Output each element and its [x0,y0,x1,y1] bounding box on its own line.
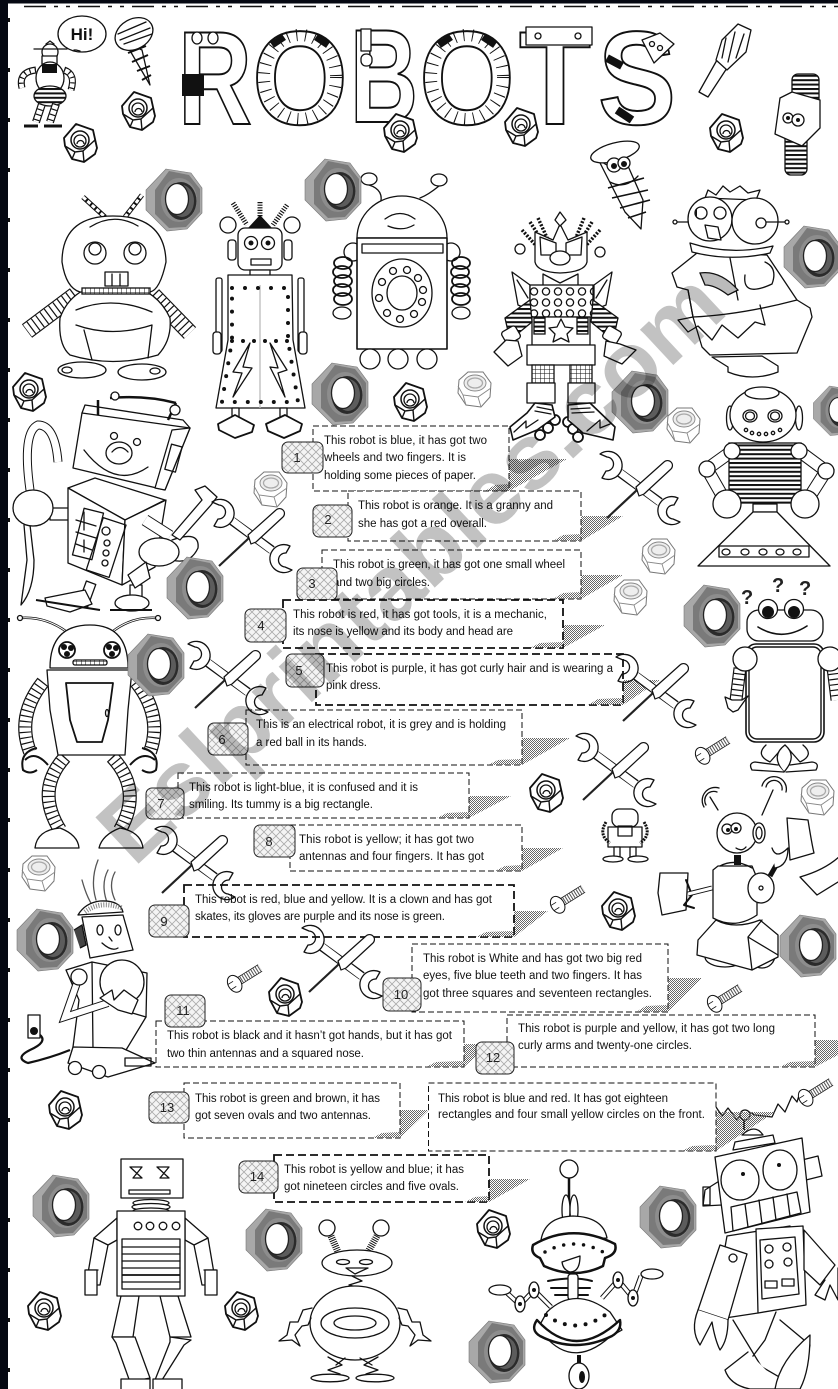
callout: blue and red robot: This robot is blue and red. It has got eighteen [438,1093,668,1105]
icon: big nut [612,371,668,433]
icon: small nut [122,92,155,130]
robot: saucer robot [489,1160,663,1389]
callout 8 [254,825,563,871]
speech bubble: Hi! [71,25,93,44]
callout 7 [146,773,511,819]
icon: big nut [17,909,73,971]
icon: big nut [684,585,740,647]
callout 13: 13 [160,1100,174,1115]
callout 14: got nineteen circles and five ovals. [284,1181,459,1193]
callout 5 [286,654,660,705]
callout 8: This robot is yellow; it has got two [299,834,474,846]
robot: mechanic holding wrench [13,392,217,612]
icon: big nut [784,226,838,288]
callout: blue and red robot [428,1083,775,1151]
callout 12 [476,1015,838,1074]
callout 12: 12 [486,1050,500,1065]
callout 1: 1 [293,450,301,465]
callout 2: 2 [324,512,332,527]
icon: bolt [704,980,745,1015]
question marks [741,575,811,609]
callout 4: 4 [257,618,265,633]
callout 11: 11 [176,1003,190,1018]
robot: granny [672,186,812,377]
callout 1: wheels and two fingers. It is [323,452,466,464]
callout 12: curly arms and twenty-one circles. [518,1040,692,1052]
callout 10 [383,944,702,1012]
icon: big nut [469,1321,525,1383]
icon: big nut [312,363,368,425]
robot: green rectangles robot [85,1159,217,1389]
callout 10: 10 [394,987,408,1002]
callout 6: 6 [218,732,226,747]
icon: small nut [710,114,743,152]
callout 6 [208,710,570,765]
icon: big nut [146,169,202,231]
icon: big nut [167,557,223,619]
robot: confused robot with question marks [725,575,838,772]
title [178,3,676,153]
icon: wrench and screwdriver [212,499,292,573]
callout 11: This robot is black and it hasn’t got hands, but it has got [167,1030,453,1042]
icon: light nut [642,539,675,574]
icon: robot saying hi [21,16,106,126]
callout 1: This robot is blue, it has got two [324,435,487,447]
icon: small nut [384,114,417,152]
callout 7: This robot is light-blue, it is confused and it is [189,782,418,794]
callout 8: 8 [265,834,273,849]
icon: small nut [64,124,97,162]
robot: striped robot with triangle base [698,387,834,566]
callout 14: 14 [250,1169,264,1184]
callout 4: This robot is red, it has got tools, it is a mechanic, [293,609,547,621]
callout 2 [313,491,623,541]
callout 6: a red ball in its hands. [256,737,367,749]
callout 10: eyes, five blue teeth and two fingers. It has [423,970,642,982]
icon: smiling screw [589,137,650,229]
callout 13: This robot is green and brown, it has [195,1093,380,1105]
callout 9: 9 [160,914,168,929]
icon: small nut [505,108,538,146]
robot: oval alien [279,1220,431,1382]
robot: toaster holding ball [21,860,155,1078]
icon: small nut [28,1292,61,1330]
callout 5: This robot is purple, it has got curly hair and is wearing a [326,663,614,675]
title: R [178,5,252,153]
icon: small nut [269,978,302,1016]
icon: bolt [795,1074,836,1109]
callout 10: This robot is White and has got two big red [423,953,642,965]
callout 7: 7 [157,796,165,811]
icon: light nut [667,408,700,443]
icon: wrench and screwdriver [302,925,382,999]
icon: bolt [547,881,588,916]
robot: fat robot with goggles [27,195,190,380]
callout 12: This robot is purple and yellow, it has got two long [518,1023,775,1035]
robot: electrical robot with dress [213,202,307,438]
icon: wrench and screwdriver [188,641,268,715]
title: O [252,5,348,153]
icon: mini robot [603,809,648,862]
icon: bolt [692,732,733,767]
callout 1 [282,426,567,491]
callout 3: This robot is green, it has got one small wheel [333,559,565,571]
callout 3: 3 [308,576,316,591]
icon: light nut [458,372,491,407]
callout 9: skates, its gloves are purple and its nose is green. [195,911,445,923]
icon: big nut [813,386,838,436]
watermark: Eslprintables.com [78,252,744,883]
title: O [419,5,515,153]
callout 7: smiling. Its tummy is a big rectangle. [189,799,373,811]
callout 13: got seven ovals and two antennas. [195,1110,371,1122]
icon: big nut [33,1175,89,1237]
callout 13 [149,1083,429,1138]
robot: clown on skates [494,212,636,442]
robot: telephone robot with curly arms [333,173,470,369]
title: S [598,5,676,153]
callout 2: she has got a red overall. [358,518,487,530]
callout 4 [245,600,605,648]
callout 10: got three squares and seventeen rectangles. [423,988,652,1000]
icon: small nut [477,1210,510,1248]
robot: big robot with zigzag antenna [694,1092,838,1389]
callout 9 [149,885,548,937]
title: B [350,3,418,151]
callout 2: This robot is orange. It is a granny and [358,500,553,512]
robot: paper holding robot [658,777,838,970]
callout 5: pink dress. [326,680,381,692]
icon: light nut [22,856,55,891]
callout 8: antennas and four fingers. It has got [299,851,485,863]
icon: small nut [394,383,427,421]
question marks: ? [799,578,811,600]
callout 5: 5 [295,663,303,678]
icon: wrench and screwdriver [600,451,680,525]
icon: screwdriver [699,24,751,97]
icon: big nut [640,1186,696,1248]
callout 4: its nose is yellow and its body and head are [293,626,513,638]
icon: wrench and screwdriver [576,733,656,807]
icon: light nut [254,472,287,507]
callout 1: holding some pieces of paper. [324,470,476,482]
question marks: ? [772,575,784,597]
icon: big nut [305,159,361,221]
icon: wrench and screwdriver [616,654,696,728]
callout 11 [156,995,490,1067]
icon: bolt with face [775,74,820,175]
callout 3: and two big circles. [333,577,430,589]
icon: screw [109,11,159,85]
callout: blue and red robot: rectangles and four small yellow circles on the front. [438,1109,705,1121]
icon: small nut [602,892,635,930]
question marks: ? [741,587,753,609]
callout 11: two thin antennas and a squared nose. [167,1048,364,1060]
robot: black alien with door [18,616,160,848]
callout 9: This robot is red, blue and yellow. It is a clown and has got [195,894,493,906]
callout 14: This robot is yellow and blue; it has [284,1164,464,1176]
icon: big nut [128,634,184,696]
callout 6: This is an electrical robot, it is grey and is holding [256,719,506,731]
icon: light nut [801,780,834,815]
callout 14 [239,1155,530,1202]
icon: small nut [225,1292,258,1330]
icon: light nut [614,580,647,615]
title: T [519,5,591,153]
icon: big nut [780,915,836,977]
icon: small nut [13,373,46,411]
icon: bolt [224,960,265,995]
callout 3 [297,550,623,600]
icon: wrench and screwdriver [155,826,235,900]
icon: small nut [530,774,563,812]
icon: big nut [246,1209,302,1271]
icon: small nut [49,1091,82,1129]
